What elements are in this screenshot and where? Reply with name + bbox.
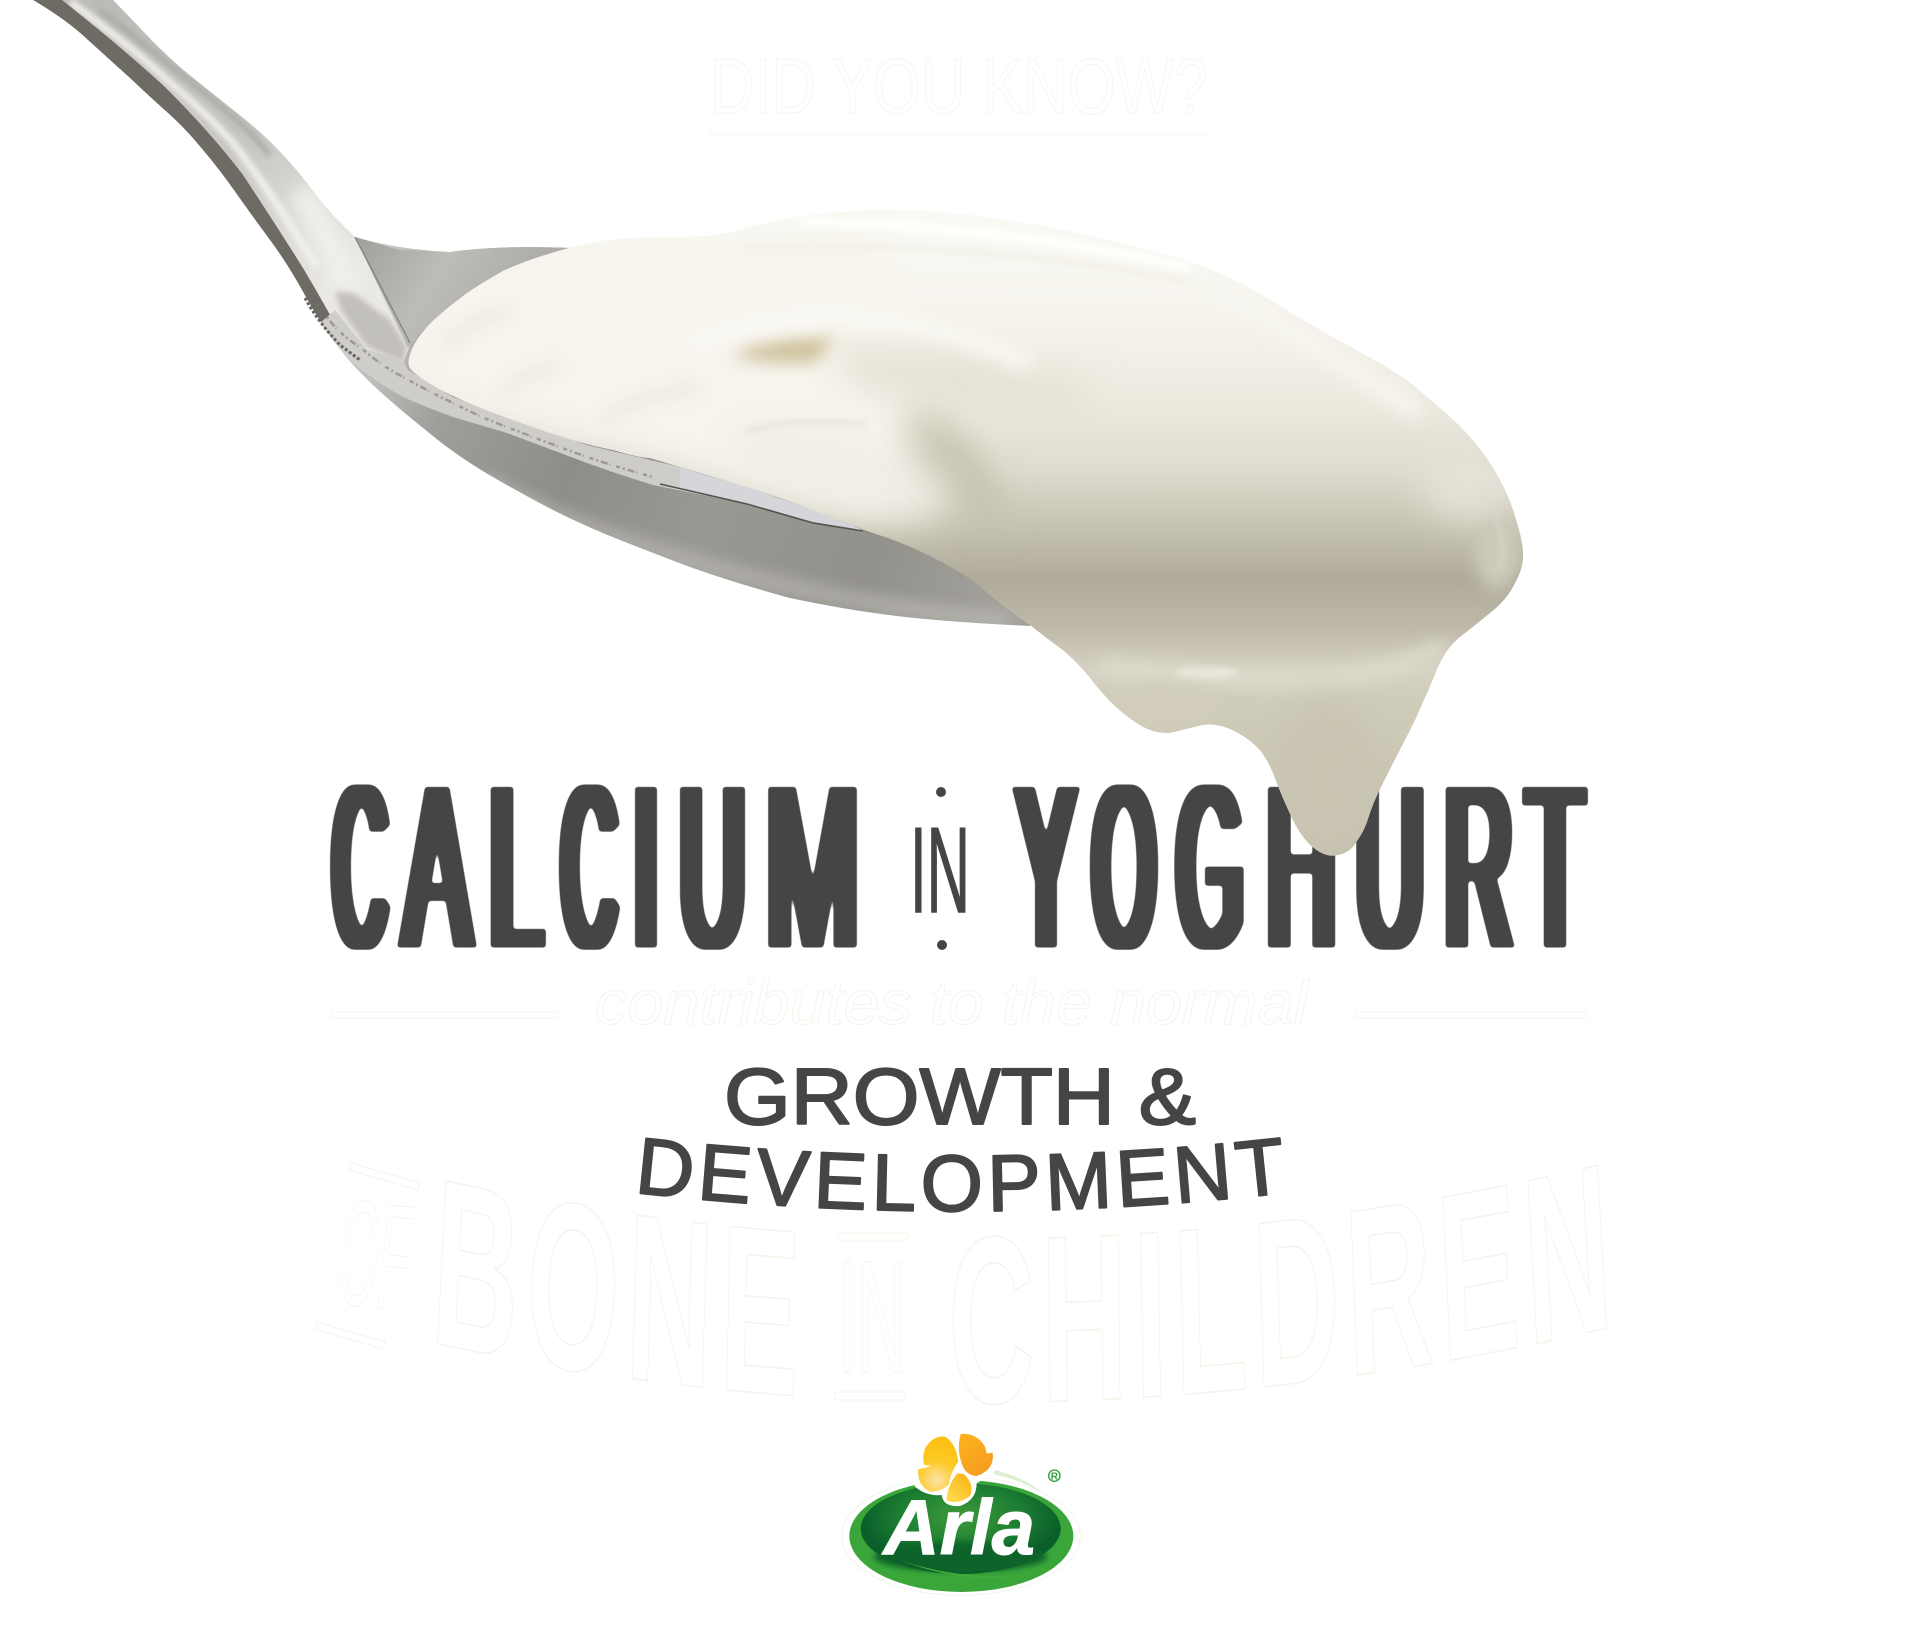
inner bowl [355,237,575,348]
heading: of bone in children: IN [838,1227,906,1406]
drip shading [1125,714,1130,718]
dot above in [936,787,946,797]
ridge highlight above crease [915,326,1028,370]
title word: yoghurt: R [1445,738,1512,997]
lower light lobe [767,468,951,540]
handle dark edge [33,0,345,342]
title word: yoghurt: O [1093,738,1155,997]
subheading: contributes to the normal: contributes to the normal [595,969,1310,1038]
title: calcium in yoghurt: IN [910,802,970,938]
heading: growth and development: DEVELOPMENT [640,1137,1282,1213]
title word: calcium [333,738,859,997]
left bright area [408,248,912,514]
title word: calcium: U [680,738,745,997]
title word: yoghurt: U [1356,738,1424,997]
title word: yoghurt: Y [1017,738,1075,997]
subheading: contributes to the normal [332,969,1586,1038]
logo wordmark: Arla [881,1483,1035,1571]
registered mark [1049,1470,1060,1482]
right end highlight [1423,471,1512,532]
fold shadow [900,405,998,530]
heading: growth and development: GROWTH & [724,1052,1196,1141]
heading: did you know: DID YOU KNOW? [710,42,1208,130]
crease shadow [738,338,835,362]
title: calcium in yoghurt: M [766,738,859,997]
infographic canvas: T [1527,738,1583,997]
rim band [320,310,863,531]
dot below in [937,940,947,950]
title word: calcium: A [404,738,470,997]
logo flower [914,1430,996,1506]
neck grey triangle [335,292,407,363]
title word: calcium: I [634,738,658,997]
title word: yoghurt: G [1177,738,1243,997]
heading: growth and development [640,1052,1282,1213]
jagged rim line [327,317,653,477]
soft folds [452,313,686,414]
lower rim highlight [1100,645,1445,680]
heading: of bone in children: OF [332,1168,419,1342]
silver strip under yoghurt [680,468,863,530]
spoon bowl and handle silhouette [33,0,1030,626]
handle stipple [305,298,360,360]
infographic canvas [33,0,1607,1596]
title word: calcium: C [562,738,616,997]
title word: yoghurt [1017,738,1583,997]
logo oval [842,1470,1080,1595]
spoon [33,0,1030,626]
top ridge lines [745,246,1190,282]
title word: calcium: L [490,738,542,997]
registered mark: R [1051,1471,1058,1482]
handle light face [60,0,410,372]
heading: of bone in children: BONE [437,1180,795,1396]
heading: of bone in children [314,1162,1607,1406]
title word: yoghurt: H [1267,738,1336,997]
broad shadow beyond crease [838,340,1067,404]
title: calcium in yoghurt [333,738,1583,997]
yoghurt dollop [408,210,1524,856]
heading: of bone in children: CHILDREN [953,1164,1607,1406]
title word: calcium: C [333,738,386,997]
logo: arla [842,1430,1080,1595]
